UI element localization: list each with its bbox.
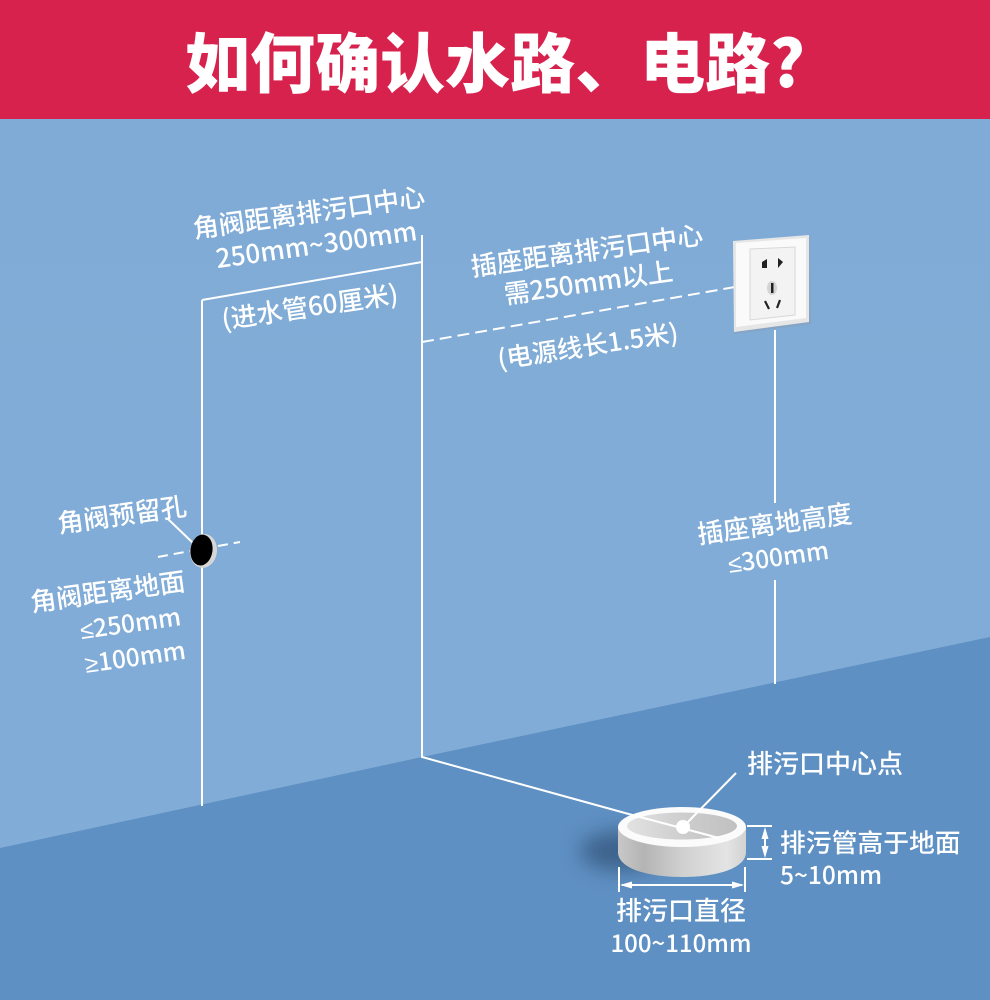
label: socket height: ≤300mm bbox=[726, 532, 831, 581]
socket height line bbox=[774, 330, 776, 684]
label: drain diameter: 100~110mm bbox=[610, 924, 752, 959]
label: valve height from floor bbox=[28, 561, 197, 687]
label: socket height: 插座离地高度 bbox=[695, 493, 854, 552]
label: inlet pipe length: (进水管60厘米) bbox=[219, 274, 400, 337]
title: 如何确认水路、电路? bbox=[185, 12, 805, 106]
label: pipe height: 5~10mm bbox=[780, 857, 882, 892]
label: valve to drain distance: 250mm~300mm bbox=[213, 211, 419, 276]
label: valve to drain distance bbox=[190, 177, 432, 279]
floor bbox=[0, 637, 990, 1000]
label: pipe height bbox=[780, 823, 961, 892]
label: valve hole: 角阀预留孔 bbox=[55, 486, 189, 541]
measurement lines: angle valve and wall reference bbox=[202, 235, 625, 813]
arrow: pipe height bbox=[747, 826, 772, 859]
label: valve to drain distance: 角阀距离排污口中心 bbox=[190, 177, 427, 246]
label: drain diameter: 排污口直径 bbox=[616, 891, 746, 928]
icon: drain pipe bbox=[580, 773, 746, 877]
label: drain centre point: 排污口中心点 bbox=[747, 744, 903, 781]
label: drain diameter bbox=[610, 891, 752, 959]
label: power cord length: (电源线长1.5米) bbox=[495, 313, 681, 376]
title banner bbox=[0, 0, 990, 119]
label: valve height from floor: 角阀距离地面 bbox=[28, 561, 187, 620]
label: socket to drain distance bbox=[468, 215, 710, 316]
label: socket to drain distance: 需250mm以上 bbox=[501, 251, 675, 312]
label: socket height bbox=[695, 493, 859, 584]
pointer: valve hole bbox=[168, 519, 193, 543]
dashed centre line through valve hole bbox=[158, 542, 240, 557]
label: valve height from floor: ≥100mm bbox=[82, 632, 188, 681]
label: socket to drain distance: 插座距离排污口中心 bbox=[468, 215, 705, 284]
icon: wall socket bbox=[733, 235, 811, 334]
label: pipe height: 排污管高于地面 bbox=[780, 823, 961, 860]
dashed line: socket distance bbox=[422, 287, 735, 342]
arrow: drain diameter bbox=[619, 867, 745, 892]
icon: angle valve hole bbox=[188, 532, 219, 570]
label: valve height from floor: ≤250mm bbox=[78, 598, 183, 647]
